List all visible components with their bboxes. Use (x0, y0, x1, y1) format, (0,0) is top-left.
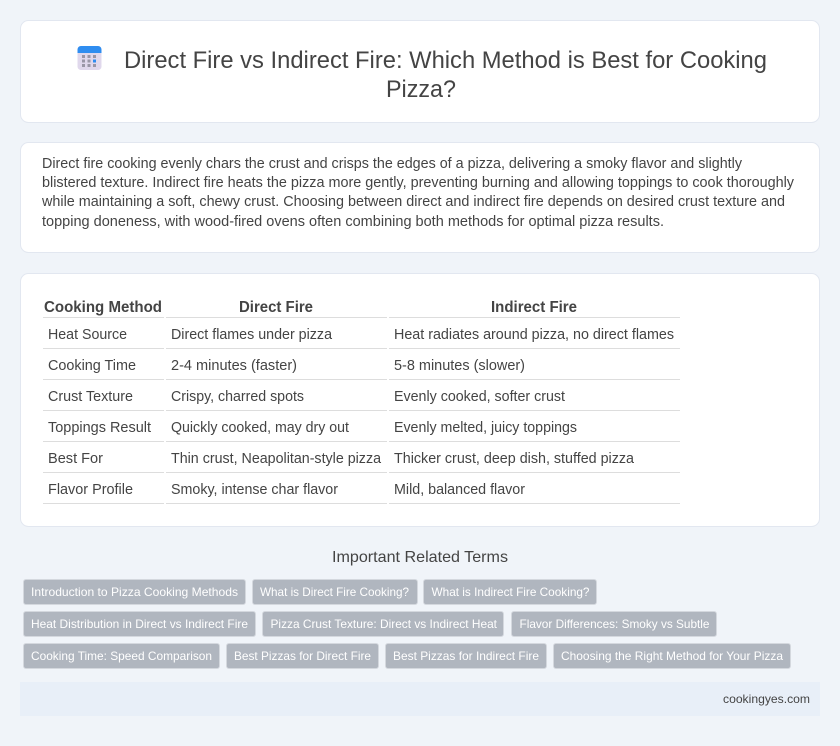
tag (24, 644, 220, 668)
row: best for: Thicker crust, deep dish, stuffed pizza (394, 451, 634, 467)
footer: cookingyes.com (723, 692, 810, 706)
tag: Introduction to Pizza Cooking Methods (31, 585, 238, 599)
tag: What is Indirect Fire Cooking? (432, 585, 590, 599)
tag (24, 580, 246, 604)
tag (386, 644, 546, 668)
table header: Cooking Method (44, 299, 162, 316)
tag (512, 612, 716, 636)
row: heat source: Direct flames under pizza (171, 327, 332, 343)
text block: introduction: Direct fire cooking evenly chars the crust and crisps the edges of a pizza, delivering a smoky flavor and slightly (42, 156, 743, 172)
row: crust texture: Evenly cooked, softer crust (394, 389, 565, 405)
tag (24, 612, 256, 636)
tag: What is Direct Fire Cooking? (260, 585, 409, 599)
tag: Choosing the Right Method for Your Pizza (561, 649, 783, 663)
text block: introduction: topping doneness, with wood-fired ovens often combining both methods for optimal pizza results. (42, 214, 664, 230)
heading: related terms: Important Related Terms (332, 549, 508, 566)
row: flavor profile (48, 482, 525, 498)
footer (20, 682, 820, 716)
row: heat source (48, 327, 674, 343)
tag (262, 612, 504, 636)
row: cooking time: 5-8 minutes (slower) (394, 358, 525, 374)
tags: related terms (24, 580, 790, 668)
title: Direct Fire vs Indirect Fire: Which Method is Best for Cooking (124, 47, 767, 74)
icon: calendar (78, 46, 102, 70)
row: flavor profile: Mild, balanced flavor (394, 482, 525, 498)
table header: Indirect Fire (491, 299, 577, 316)
title (124, 47, 767, 103)
row: toppings result: Toppings Result (48, 420, 151, 436)
row: heat source: Heat radiates around pizza, no direct flames (394, 327, 674, 343)
text block: introduction: while maintaining a soft, chewy crust. Choosing between direct and indirect fire depends on desired crust texture and (41, 194, 785, 210)
row: cooking time (48, 358, 525, 374)
row: crust texture: Crust Texture (48, 389, 133, 405)
tag (424, 580, 596, 604)
row: flavor profile: Flavor Profile (48, 482, 133, 498)
row: best for: Thin crust, Neapolitan-style pizza (171, 451, 381, 467)
row: toppings result (48, 420, 577, 436)
row: toppings result: Evenly melted, juicy toppings (394, 420, 577, 436)
panel: introduction (20, 142, 820, 252)
row: cooking time: Cooking Time (48, 358, 136, 374)
tag (554, 644, 790, 668)
row: cooking time: 2-4 minutes (faster) (171, 358, 297, 374)
table header (44, 299, 577, 316)
row: crust texture (48, 389, 565, 405)
row: crust texture: Crispy, charred spots (171, 389, 304, 405)
row: flavor profile: Smoky, intense char flavor (171, 482, 338, 498)
row: toppings result: Quickly cooked, may dry out (171, 420, 349, 436)
text block: introduction (41, 156, 795, 230)
tag: Cooking Time: Speed Comparison (31, 649, 212, 663)
table header: Direct Fire (239, 299, 313, 316)
tag: Best Pizzas for Direct Fire (234, 649, 371, 663)
row: best for (48, 451, 634, 467)
tag (226, 644, 378, 668)
row: best for: Best For (48, 451, 103, 467)
title: Pizza? (386, 76, 456, 103)
tag: Flavor Differences: Smoky vs Subtle (520, 617, 710, 631)
row: heat source: Heat Source (48, 327, 127, 343)
tag: Heat Distribution in Direct vs Indirect Fire (31, 617, 248, 631)
tag: Pizza Crust Texture: Direct vs Indirect Heat (270, 617, 498, 631)
panel: comparison table (20, 274, 820, 526)
panel: header (20, 20, 820, 122)
text block: introduction: blistered texture. Indirect fire heats the pizza more gently, preventing burning and allowing toppings to cook thoroughly (42, 175, 795, 191)
tag: Best Pizzas for Indirect Fire (393, 649, 539, 663)
tag (252, 580, 418, 604)
